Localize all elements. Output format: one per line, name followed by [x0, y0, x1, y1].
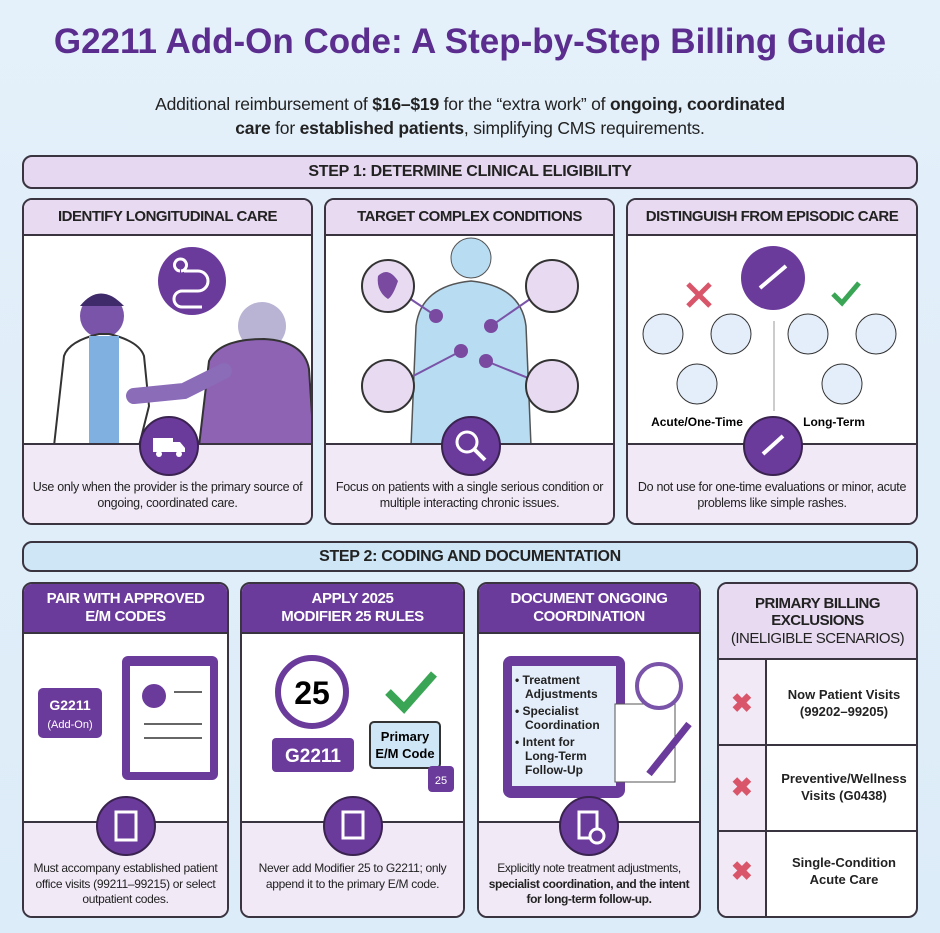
- panel: identify longitudinal care: Use only when the provider is the primary source of ongoing, coordinated care.: [33, 480, 302, 510]
- panel: primary billing exclusions: EXCLUSIONS: [771, 612, 864, 629]
- panel: identify longitudinal care: IDENTIFY LONGITUDINAL CARE: [58, 208, 277, 225]
- illustration: 25 badge, G2211 and primary E/M tag: [272, 655, 454, 792]
- subtitle: [155, 94, 785, 138]
- illustration: tablet with checklist: Adjustments: [525, 687, 598, 701]
- illustration: 25 badge, G2211 and primary E/M tag: G2211: [285, 746, 341, 767]
- illustration: tablet with checklist: • Treatment: [515, 673, 580, 687]
- subtitle: Additional reimbursement of $16–$19 for the “extra work” of ongoing, coordinated: [155, 94, 785, 114]
- panel: distinguish from episodic care: DISTINGUISH FROM EPISODIC CARE: [646, 208, 898, 225]
- panel: primary billing exclusions: PRIMARY BILLING: [755, 595, 880, 612]
- illustration: acute vs long-term comparison: Acute/One-Time: [651, 415, 743, 429]
- panel: target complex conditions: Focus on patients with a single serious condition or multiple interacting chronic issues.: [336, 480, 603, 510]
- panel: document ongoing coordination: [477, 582, 701, 918]
- panel: apply 2025 modifier 25 rules: MODIFIER 25 RULES: [281, 608, 424, 625]
- illustration: tablet with checklist: Follow-Up: [525, 763, 583, 777]
- subtitle: care for established patients, simplifying CMS requirements.: [235, 118, 705, 138]
- row: preventive visits: Preventive/Wellness: [781, 771, 907, 786]
- illustration: 25 badge, G2211 and primary E/M tag: E/M Code: [375, 746, 435, 761]
- panel: apply 2025 modifier 25 rules: [240, 582, 465, 918]
- panel: pair with approved E/M codes: PAIR WITH APPROVED: [47, 590, 204, 607]
- icon: checklist: [96, 796, 156, 856]
- illustration: doctor and patient handshake: [53, 247, 311, 443]
- panel: apply 2025 modifier 25 rules: APPLY 2025: [312, 590, 393, 607]
- panel: apply 2025 modifier 25 rules: Never add Modifier 25 to G2211; only append it to the primary E/M code.: [259, 861, 446, 891]
- row: single-condition acute care: [731, 855, 896, 887]
- illustration: tablet with checklist: • Specialist: [515, 704, 579, 718]
- illustration: tablet with checklist: [503, 656, 692, 798]
- icon: document clock: [559, 796, 619, 856]
- panel: pair with approved E/M codes: Must accompany established patient office visits (99211–99215) or select outpatient codes.: [34, 861, 217, 906]
- illustration: 25 badge, G2211 and primary E/M tag: 25: [435, 775, 447, 787]
- step 2 header bar: [22, 541, 918, 572]
- row: preventive visits: [719, 746, 920, 832]
- illustration: 25 badge, G2211 and primary E/M tag: 25: [294, 675, 330, 711]
- icon: link: [743, 416, 803, 476]
- panel: target complex conditions: TARGET COMPLEX CONDITIONS: [357, 208, 582, 225]
- illustration: tablet with checklist: Coordination: [525, 718, 600, 732]
- panel: pair with approved E/M codes: [22, 582, 229, 918]
- illustration: clipboard with G2211 tag: G2211: [49, 697, 91, 713]
- exclusion rows: [719, 660, 916, 916]
- icon: document stamp: [323, 796, 383, 856]
- row: single-condition acute care: Acute Care: [810, 872, 878, 887]
- panel: distinguish from episodic care: [626, 198, 918, 525]
- icon: magnifier: [441, 416, 501, 476]
- row: new patient visits: ✖: [731, 688, 753, 718]
- panel: document ongoing coordination: Explicitly note treatment adjustments, specialist coordination, and the intent for long-term follow-up.: [489, 861, 689, 906]
- illustration: tablet with checklist: Long-Term: [525, 749, 587, 763]
- panel: identify longitudinal care: [22, 198, 313, 525]
- panel: pair with approved E/M codes: E/M CODES: [85, 608, 166, 625]
- panel: distinguish from episodic care: Do not use for one-time evaluations or minor, acute problems like simple rashes.: [638, 480, 906, 510]
- step 1 header bar: [22, 155, 918, 189]
- panel: primary billing exclusions: (INELIGIBLE SCENARIOS): [731, 630, 904, 647]
- row: single-condition acute care: ✖: [731, 856, 753, 886]
- step 2 header bar: STEP 2: CODING AND DOCUMENTATION: [319, 548, 621, 565]
- row: new patient visits: (99202–99205): [800, 704, 888, 719]
- panel: document ongoing coordination: DOCUMENT ONGOING: [511, 590, 667, 607]
- illustration: acute vs long-term comparison: Long-Term: [803, 415, 865, 429]
- illustration: acute vs long-term comparison: [642, 246, 896, 429]
- row: preventive visits: Visits (G0438): [801, 788, 887, 803]
- icon: truck: [139, 416, 199, 476]
- row: single-condition acute care: Single-Condition: [792, 855, 896, 870]
- title: G2211 Add-On Code: A Step-by-Step Billing Guide: [54, 22, 886, 61]
- illustration: 25 badge, G2211 and primary E/M tag: Primary: [381, 729, 430, 744]
- step 1 header bar: STEP 1: DETERMINE CLINICAL ELIGIBILITY: [308, 163, 632, 180]
- illustration: tablet with checklist: • Intent for: [515, 735, 575, 749]
- row: preventive visits: ✖: [731, 772, 753, 802]
- panel: primary billing exclusions: [717, 582, 918, 918]
- row: new patient visits: Now Patient Visits: [788, 687, 900, 702]
- row: new patient visits: [719, 660, 920, 746]
- illustration: clipboard with G2211 tag: [38, 656, 218, 780]
- panel: target complex conditions: [324, 198, 615, 525]
- illustration: body with organ callouts: [361, 238, 579, 443]
- panel: document ongoing coordination: COORDINATION: [533, 608, 645, 625]
- illustration: clipboard with G2211 tag: (Add-On): [47, 719, 93, 731]
